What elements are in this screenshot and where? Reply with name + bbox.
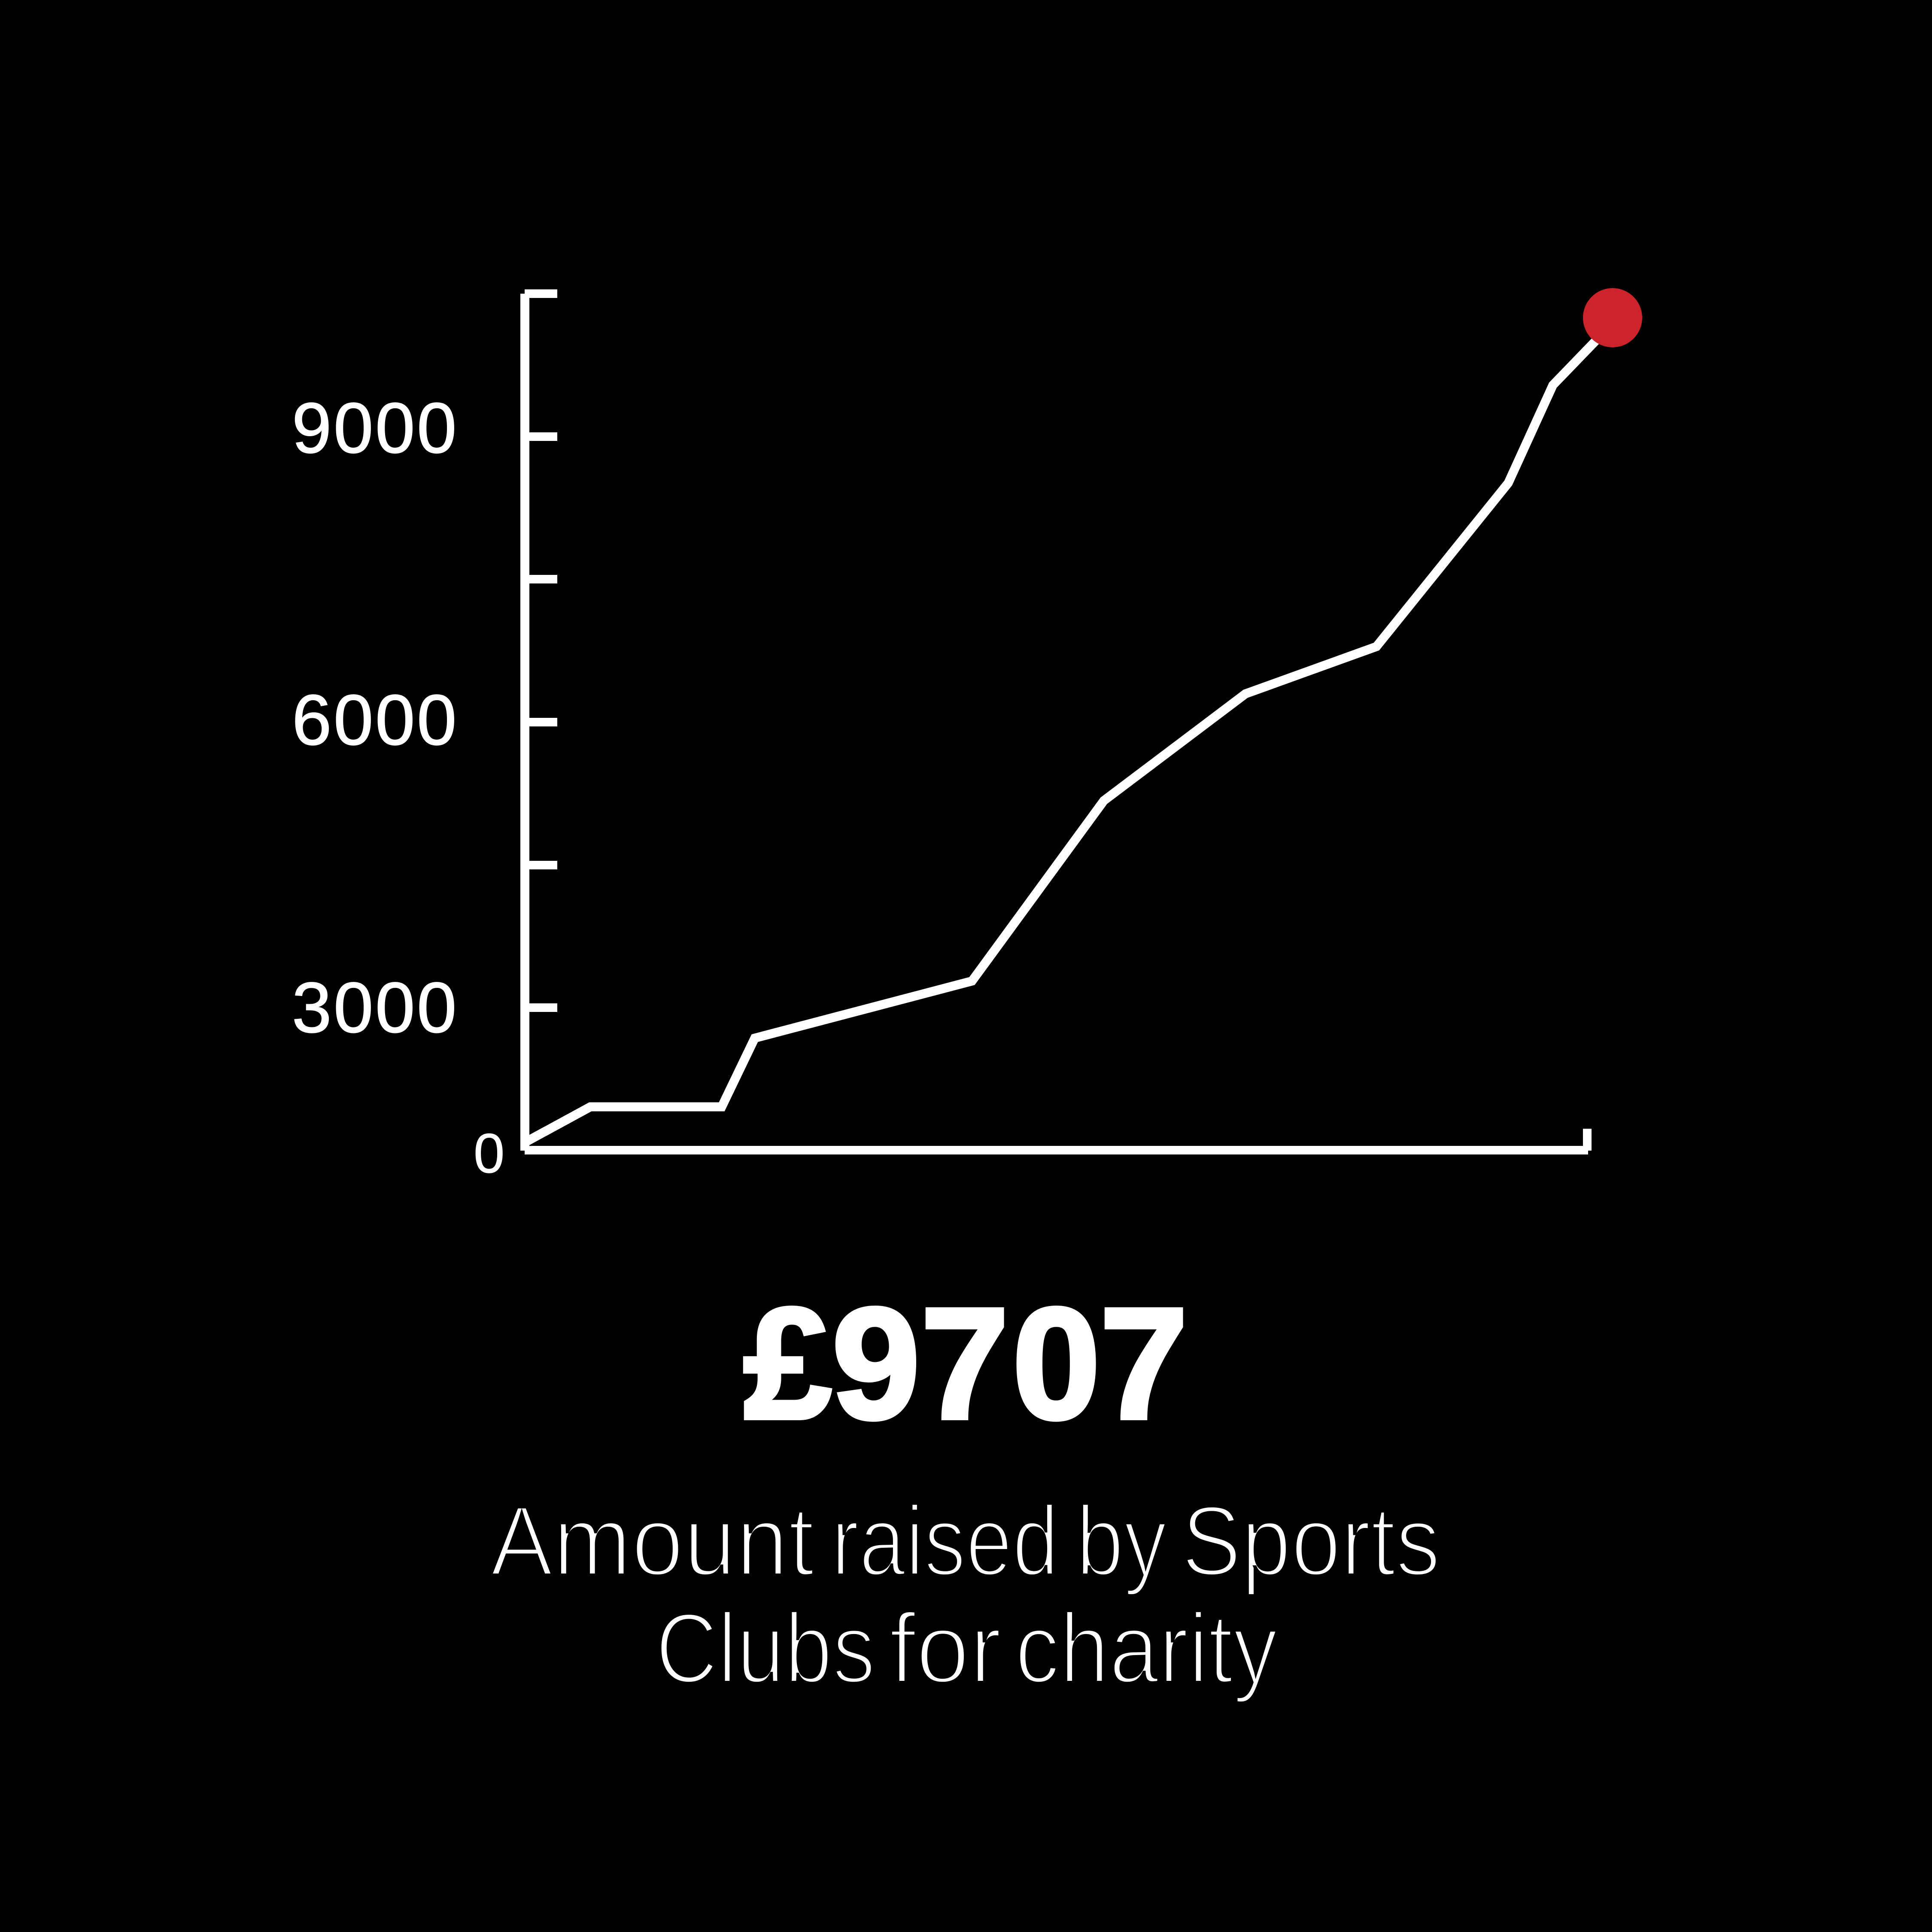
caption line 2: Clubs (656, 1593, 875, 1704)
caption line 2: for (889, 1593, 1002, 1704)
caption line 2 (656, 1593, 1278, 1704)
caption line 1: raised (831, 1485, 1059, 1597)
caption (490, 1485, 1440, 1704)
y axis labels: 9000 (292, 389, 459, 468)
caption line 1: Amount (490, 1485, 814, 1597)
y axis labels: 6000 (292, 680, 459, 760)
caption line 1 (490, 1485, 1440, 1597)
caption line 2: charity (1015, 1593, 1278, 1704)
data line (527, 335, 1601, 1141)
y axis labels: 3000 (292, 968, 459, 1048)
y axis labels (292, 389, 504, 1185)
y axis with ticks (520, 289, 557, 1151)
y axis labels: 0 (474, 1122, 504, 1185)
line chart (292, 288, 1642, 1185)
red end marker (1583, 288, 1642, 347)
x axis with end tick (525, 1129, 1592, 1154)
headline figure: £9707 (744, 1275, 1188, 1452)
caption line 1: by (1076, 1485, 1167, 1597)
caption line 1: Sports (1182, 1485, 1440, 1597)
